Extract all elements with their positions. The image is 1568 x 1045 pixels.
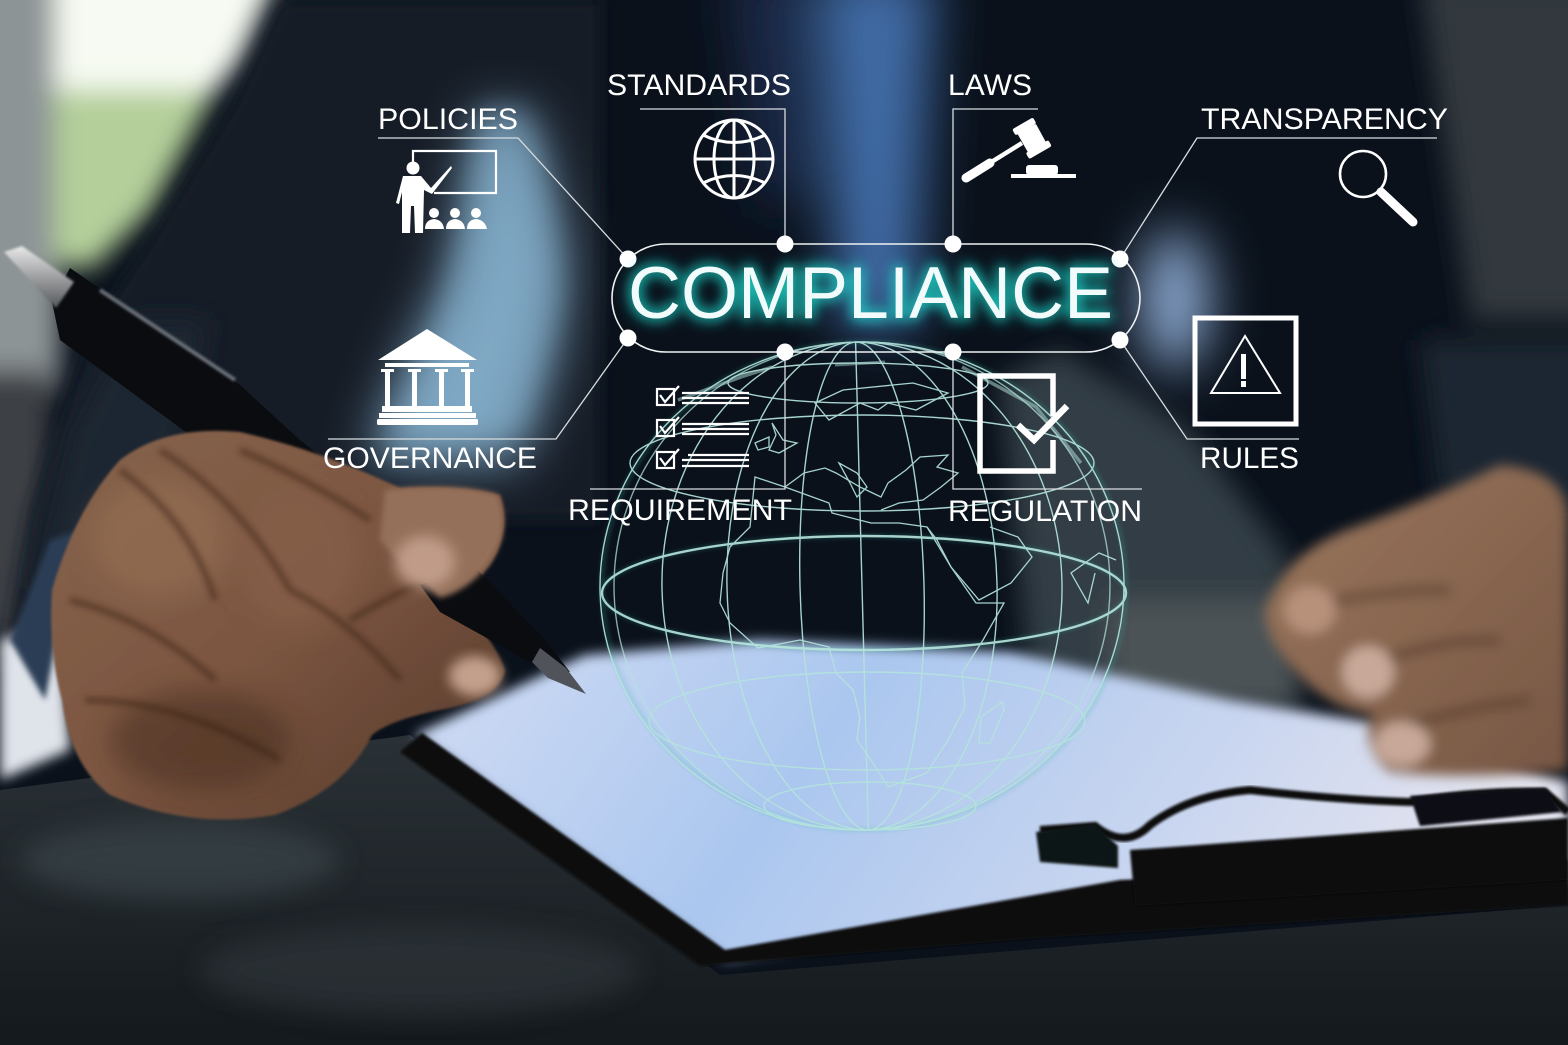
icon: check document (regulation) (980, 376, 1067, 471)
wireframe globe (594, 335, 1130, 837)
label: GOVERNANCE: GOVERNANCE (323, 442, 537, 475)
label: POLICIES: POLICIES (378, 103, 518, 136)
photo: left hand (51, 431, 505, 820)
label: REGULATION: REGULATION (948, 495, 1142, 528)
icon: globe (standards) (695, 120, 773, 198)
photo: pen barrel behind hand (4, 246, 400, 520)
label: STANDARDS: STANDARDS (607, 69, 791, 102)
label: TRANSPARENCY: TRANSPARENCY (1201, 103, 1448, 136)
label: LAWS: LAWS (948, 69, 1032, 102)
icon: teacher at board (policies) (396, 151, 496, 233)
photo: pen grip and tip (420, 562, 586, 694)
central pill with nodes (612, 236, 1140, 360)
icon: columned building (governance) (377, 329, 478, 425)
title: COMPLIANCE: COMPLIANCE (628, 253, 1113, 334)
icon: warning box (rules) (1195, 318, 1296, 424)
photo: right hand (1265, 465, 1568, 776)
connector lines (328, 109, 1437, 489)
globe glow (602, 342, 1126, 830)
globe parallels (602, 536, 1126, 650)
label: RULES: RULES (1200, 442, 1299, 475)
photo: thumb over pen (380, 487, 503, 598)
title: COMPLIANCE: COMPLIANCE (628, 253, 1113, 334)
photo: desk surface (0, 620, 1568, 1045)
icon: checklist (requirement) (657, 386, 749, 468)
label: REQUIREMENT: REQUIREMENT (568, 494, 792, 527)
globe meridians (594, 335, 1130, 837)
globe continents (678, 362, 1116, 787)
icon: magnifier (transparency) (1340, 151, 1413, 222)
photo: clipboard and paper (400, 640, 1568, 966)
icon: gavel (laws) (966, 117, 1076, 178)
photo: left sleeve (10, 530, 80, 700)
